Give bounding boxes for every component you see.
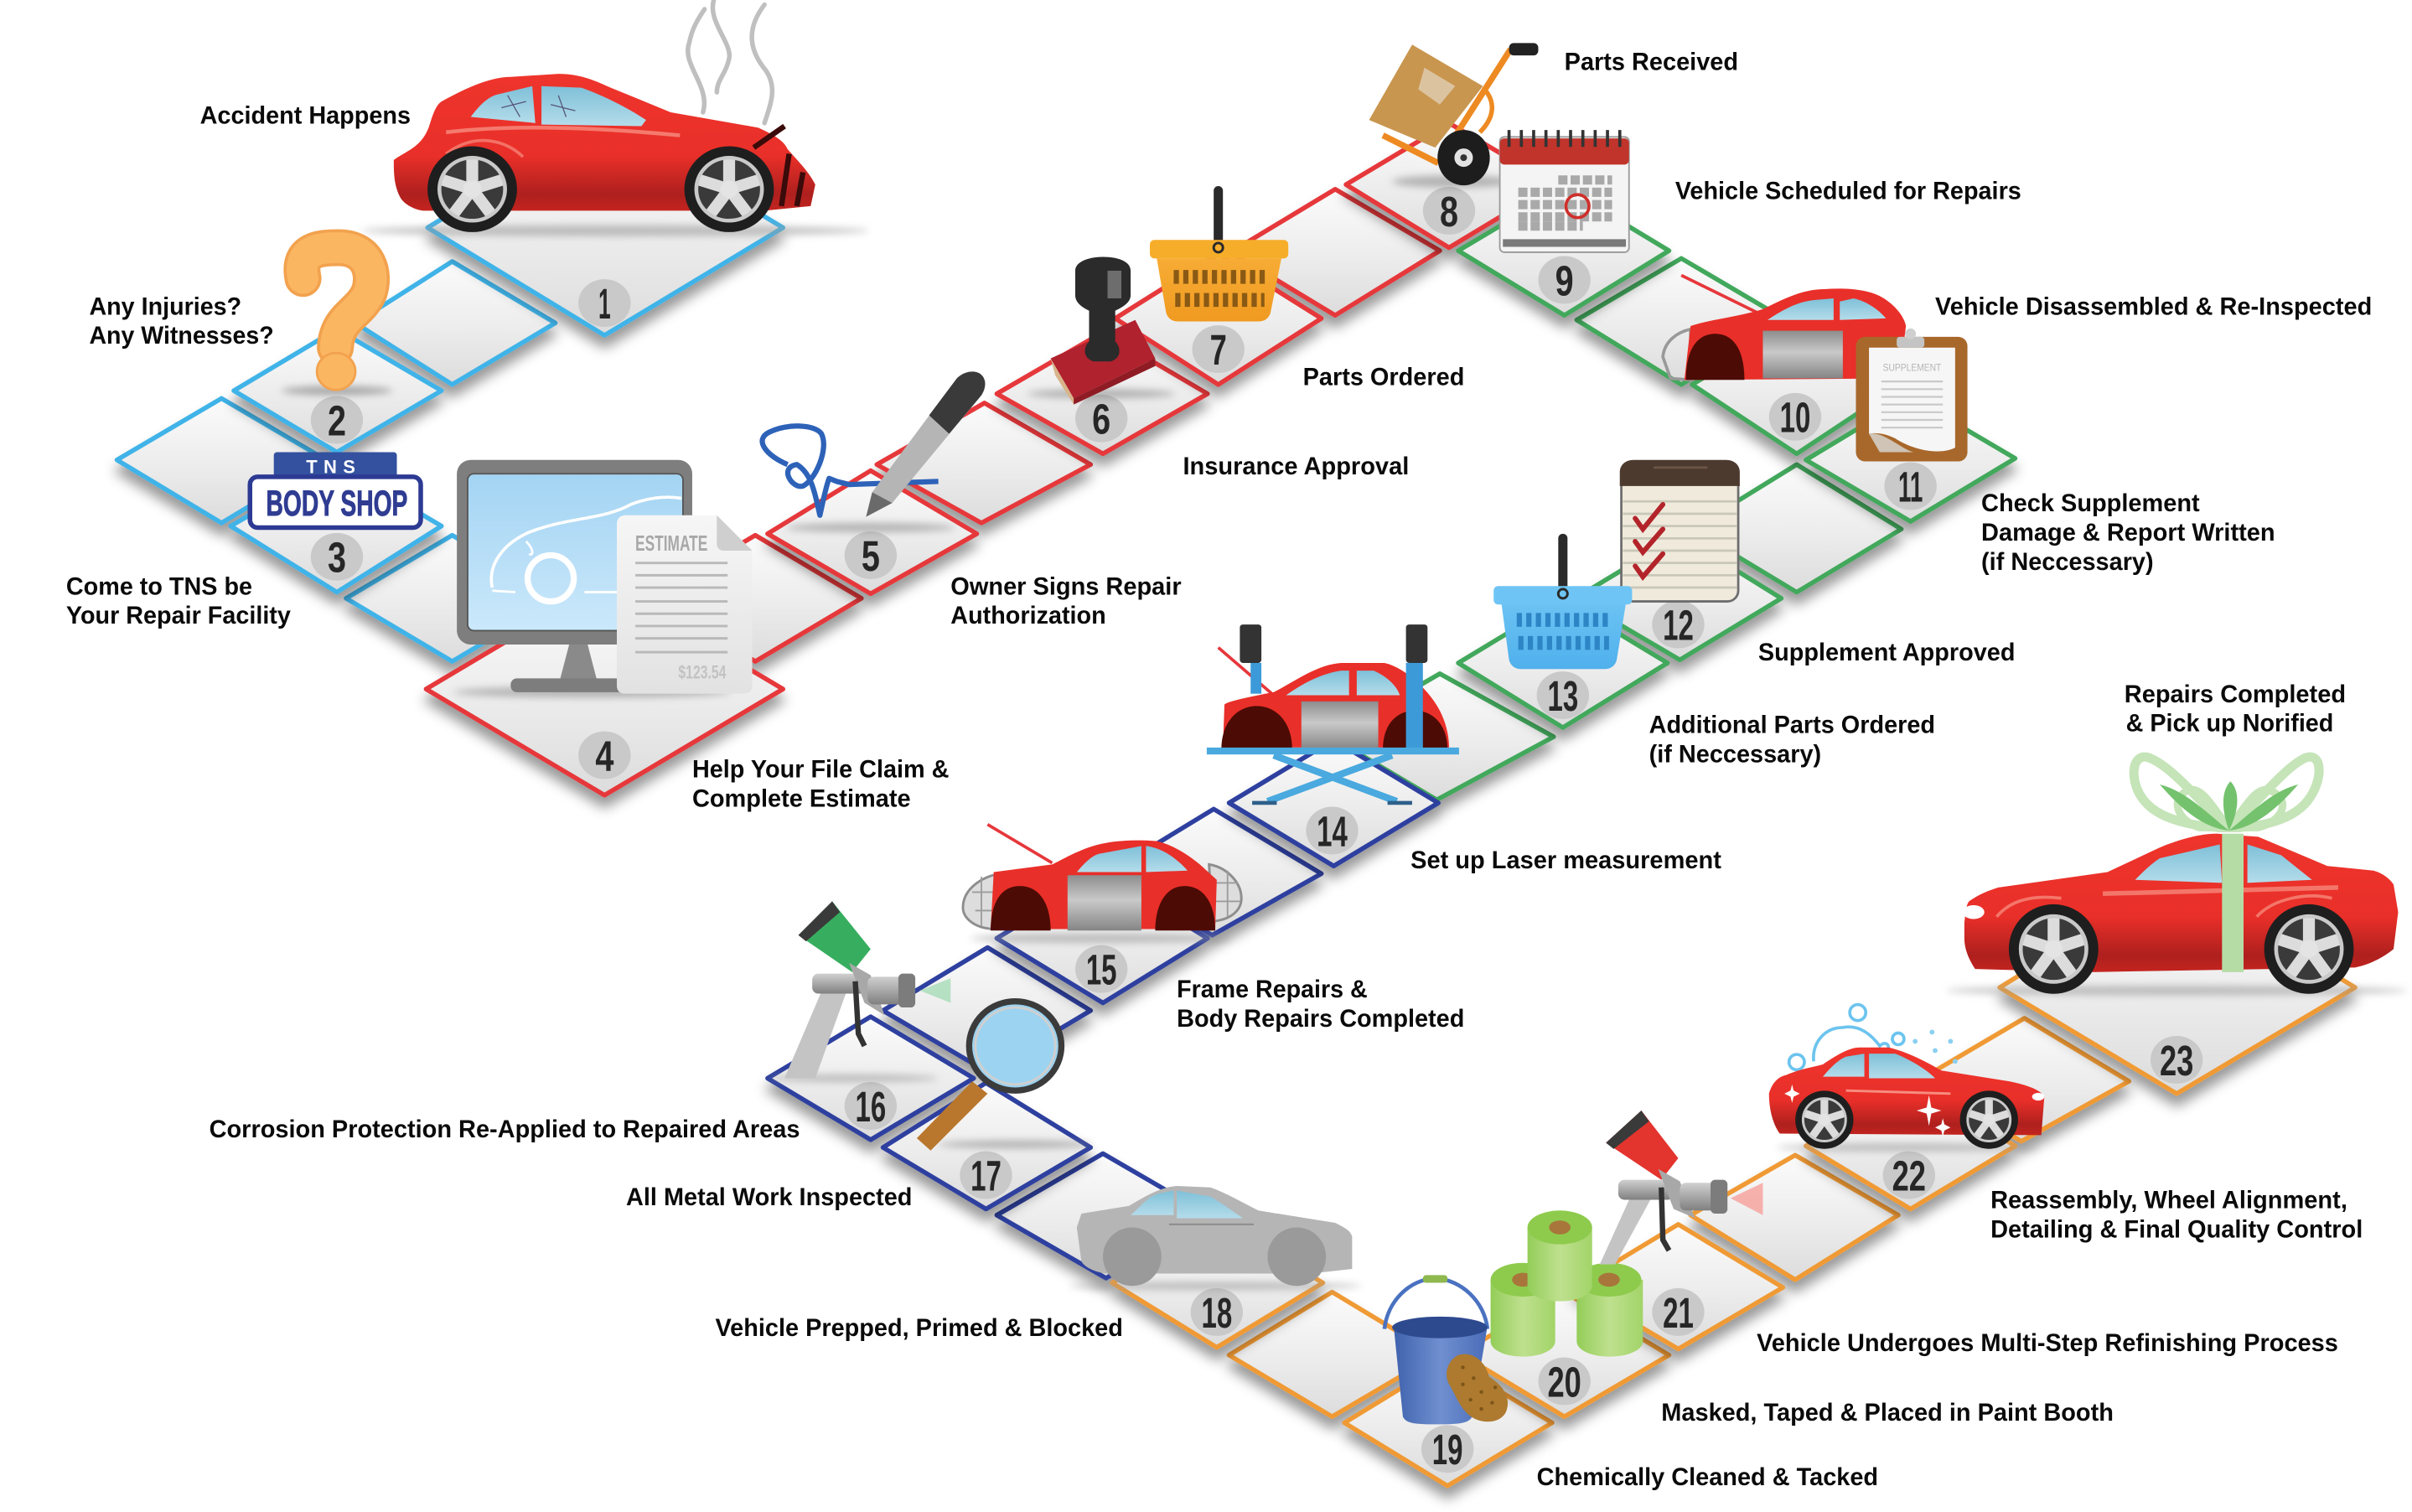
icon: question mark [282, 247, 392, 396]
icon: checklist notepad [1620, 460, 1740, 602]
label: Insurance Approval: Insurance Approval [1183, 453, 1409, 480]
tile 6: 6 [1092, 395, 1110, 443]
tile 16 [768, 1017, 974, 1140]
label: Vehicle Disassembled: Vehicle Disassembled & Re-Inspected [1935, 293, 2372, 320]
icon: frame repaired car [963, 825, 1241, 943]
tile 1: 1 [598, 279, 611, 328]
tile 23: 23 [2160, 1036, 2193, 1085]
icon: pen and signature [763, 371, 985, 532]
tile 21 [1574, 1225, 1783, 1349]
icon: supplement clipboard [1856, 329, 1968, 462]
label: Any Injuries / Any Witnesses: Any Witnesses? [89, 322, 274, 350]
icon: hand truck with box [1369, 43, 1538, 188]
tile 19 [1344, 1359, 1552, 1486]
label: Vehicle Prepped: Vehicle Prepped, Primed & Blocked [715, 1314, 1123, 1342]
tile 4: 4 [595, 731, 614, 779]
label: Check Supplement: (if Neccessary) [1981, 548, 2154, 576]
icon: calendar [1500, 137, 1629, 252]
label: Corrosion Protection: Corrosion Protection Re-Applied to Repaired Areas [210, 1116, 800, 1143]
tile 10: 10 [1780, 393, 1810, 442]
tile 1 [427, 120, 783, 335]
tile 12 [1576, 536, 1781, 660]
label: Help Your File Claim: Complete Estimate [692, 785, 911, 813]
blank tile [1920, 1018, 2129, 1142]
icon: magnifying glass [917, 1002, 1092, 1151]
label: Supplement Approved: Supplement Approved [1758, 639, 2015, 666]
icon: supplement clipboard: SUPPLEMENT [1883, 361, 1941, 373]
tile 11: 11 [1898, 462, 1923, 510]
label: Frame Repairs: Frame Repairs & [1177, 976, 1368, 1003]
label: Parts Ordered: Parts Ordered [1303, 364, 1464, 391]
label: Reassembly: Detailing & Final Quality Control [1990, 1215, 2363, 1243]
tile 20: 20 [1547, 1357, 1581, 1406]
blank tile [1690, 1155, 1898, 1280]
blank tile [1229, 1292, 1436, 1416]
icon: orange parts basket [1150, 191, 1288, 322]
tile 14 [1229, 740, 1438, 866]
tile 7: 7 [1210, 325, 1227, 374]
tile 23 [2000, 878, 2355, 1094]
icon: computer with estimate: ESTIMATE [635, 532, 707, 556]
icon: computer with estimate [453, 460, 753, 697]
blank tile [1692, 464, 1902, 593]
label: Additional Parts Ordered: (if Neccessary) [1649, 740, 1821, 768]
label: Help Your File Claim [692, 756, 949, 813]
icon: masking tape rolls [1491, 1210, 1643, 1357]
icon: TNS body shop sign: BODY SHOP [267, 484, 407, 523]
tile 5 [768, 471, 977, 593]
icon: washed car with bubbles [1769, 1005, 2044, 1152]
tile 19: 19 [1432, 1425, 1463, 1473]
tile 8 [1346, 123, 1554, 247]
icon: car on laser measurement lift [1207, 624, 1459, 803]
tile 16: 16 [856, 1082, 886, 1131]
blank tile [355, 261, 556, 385]
icon: primed grey car [1069, 1186, 1361, 1290]
label: Any Injuries / Any Witnesses [89, 293, 274, 350]
label: Check Supplement: Damage & Report Written [1981, 519, 2275, 546]
tile 3 [230, 464, 442, 593]
tile 6 [996, 332, 1208, 453]
label: Owner Signs Repair Authorization [950, 572, 1182, 629]
tile 4 [426, 583, 783, 795]
tile 12: 12 [1663, 600, 1694, 649]
label: Check Supplement: Check Supplement [1981, 489, 2200, 517]
icon: gift car [1946, 757, 2407, 995]
blank tile [877, 403, 1090, 523]
label: Help Your File Claim: Help Your File Claim & [692, 756, 949, 784]
label: Reassembly: Reassembly, Wheel Alignment, [1990, 1187, 2347, 1214]
label: Frame Repairs: Body Repairs Completed [1177, 1005, 1464, 1033]
label: Repairs Completed: & Pick up Norified [2126, 710, 2333, 738]
label: Any Injuries / Any Witnesses: Any Injuries? [89, 293, 241, 320]
blank tile [346, 536, 558, 661]
label: Owner Signs Repair Authorization: Authorization [950, 602, 1106, 629]
label: Come to TNS: Your Repair Facility [66, 602, 292, 629]
icon: disassembled car [1663, 276, 1906, 380]
label: Additional Parts Ordered [1649, 711, 1935, 768]
label: Come to TNS: Come to TNS be [66, 572, 252, 600]
tile 2: 2 [328, 396, 346, 444]
label: Chemically Cleaned: Chemically Cleaned & Tacked [1537, 1463, 1878, 1491]
tile 15 [996, 873, 1208, 1003]
tile 8: 8 [1440, 187, 1458, 236]
label: Vehicle Scheduled: Vehicle Scheduled for Repairs [1675, 178, 2021, 205]
tile 2 [234, 329, 442, 453]
tile 9: 9 [1555, 256, 1574, 304]
label: Additional Parts Ordered: Additional Parts Ordered [1649, 711, 1935, 738]
tile 18: 18 [1201, 1288, 1232, 1337]
blank tile [1108, 809, 1322, 935]
label: Repairs Completed [2125, 681, 2346, 738]
tile 22 [1806, 1081, 2015, 1209]
icon: computer with estimate: $123.54 [678, 661, 727, 682]
icon: red spray gun [1600, 1111, 1762, 1265]
tile 13: 13 [1547, 671, 1578, 720]
tile 9 [1458, 188, 1669, 315]
tile 14: 14 [1317, 806, 1348, 855]
tile 18 [1112, 1219, 1322, 1348]
tile 20 [1460, 1292, 1669, 1416]
tile 13 [1458, 600, 1668, 728]
label: Parts Received: Parts Received [1565, 49, 1738, 76]
tile 17: 17 [970, 1151, 1002, 1199]
tile 17 [883, 1083, 1090, 1209]
label: Owner Signs Repair Authorization: Owner Signs Repair [950, 572, 1182, 600]
icon: TNS body shop sign [250, 453, 421, 527]
tile 7 [1115, 254, 1322, 385]
label: All Metal Work Inspected: All Metal Work Inspected [626, 1183, 912, 1211]
blank tile [116, 398, 326, 523]
blank tile [996, 1153, 1209, 1278]
label: Check Supplement [1981, 489, 2275, 576]
label: Accident Happens: Accident Happens [200, 102, 411, 130]
blank tile [1230, 189, 1440, 315]
label: Frame Repairs [1177, 976, 1464, 1033]
icon: blue parts basket [1493, 538, 1632, 669]
blank tile [1576, 258, 1786, 385]
tile 5: 5 [862, 531, 880, 580]
tile 3: 3 [328, 533, 346, 582]
icon: TNS body shop sign: TNS [306, 456, 355, 477]
label: Come to TNS [66, 572, 292, 629]
tile 11 [1806, 396, 2015, 521]
icon: approval stamp [1027, 256, 1175, 405]
icon: smoking crashed car [361, 0, 869, 236]
tile 22: 22 [1892, 1151, 1926, 1199]
label: Reassembly [1990, 1187, 2363, 1243]
icon: green spray gun [769, 901, 950, 1082]
tile 15: 15 [1086, 945, 1117, 994]
label: Refinishing Process: Vehicle Undergoes Multi-Step Refinishing Process [1757, 1329, 2338, 1357]
label: Repairs Completed: Repairs Completed [2125, 681, 2346, 708]
icon: bucket and sponge [1385, 1275, 1508, 1424]
blank tile [650, 536, 862, 661]
blank tile [883, 947, 1090, 1072]
blank tile [1331, 674, 1554, 800]
label: Set up Laser measurement: Set up Laser measurement [1410, 847, 1721, 874]
tile 10 [1692, 323, 1902, 453]
tile 21: 21 [1663, 1288, 1694, 1337]
label: Masked, Taped: Masked, Taped & Placed in Paint Booth [1661, 1399, 2114, 1427]
